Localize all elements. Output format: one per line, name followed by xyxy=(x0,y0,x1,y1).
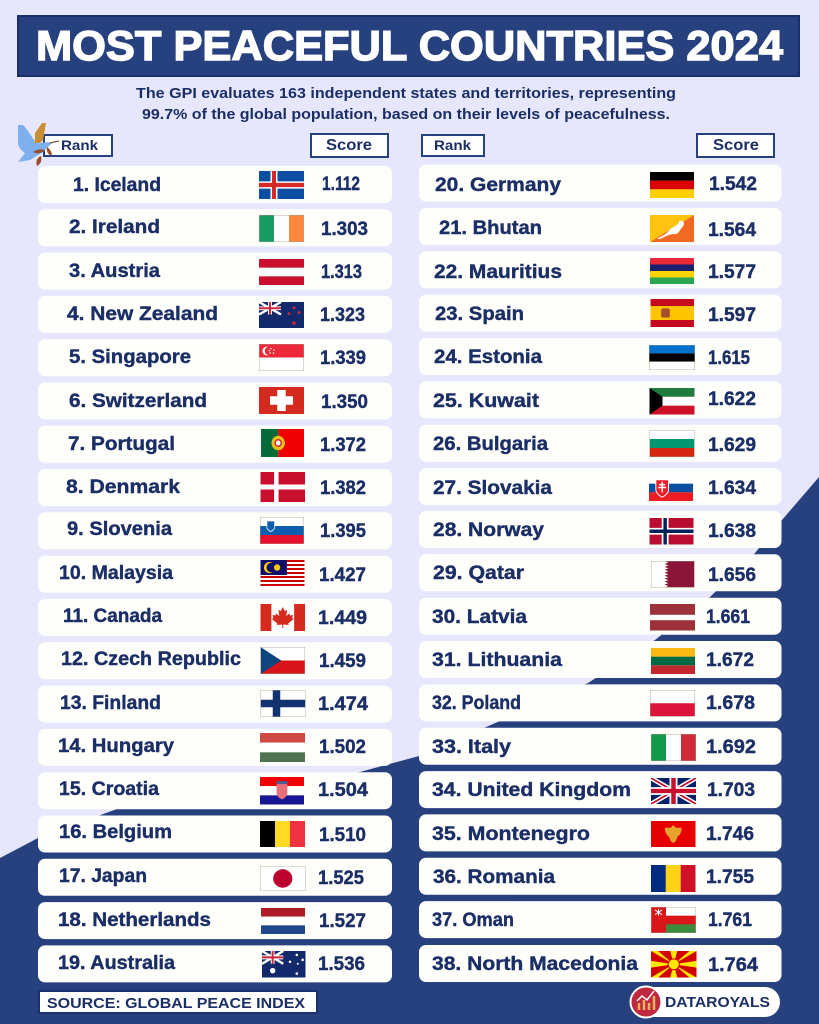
flag: Slovakia xyxy=(649,480,693,501)
row: Ireland xyxy=(38,209,392,246)
row: Mauritius xyxy=(419,251,782,288)
row: Slovenia: 1.395 xyxy=(320,520,366,542)
flag: Qatar xyxy=(651,561,694,588)
flag: Germany xyxy=(650,172,694,198)
row: Denmark: 1.382 xyxy=(320,477,366,499)
flag: Italy xyxy=(651,734,696,761)
row: Croatia: 15. Croatia xyxy=(59,778,159,800)
row: Latvia: 1.661 xyxy=(706,606,750,628)
flag: Estonia xyxy=(649,345,695,370)
row: Norway: 1.638 xyxy=(708,520,756,542)
row: Lithuania: 31. Lithuania xyxy=(432,649,562,671)
logo: Dataroyals: DATAROYALS xyxy=(665,995,770,1011)
flag: Denmark xyxy=(260,472,305,502)
row: Finland: 1.474 xyxy=(318,693,368,715)
row: Portugal xyxy=(38,426,392,463)
row: Belgium: 1.510 xyxy=(319,824,366,846)
row: Slovenia xyxy=(38,512,392,549)
row: Finland xyxy=(38,686,392,723)
flag: Spain xyxy=(650,299,694,327)
row: Iceland: 1. Iceland xyxy=(73,174,161,196)
row: Germany: 20. Germany xyxy=(435,174,561,196)
row: Bulgaria: 26. Bulgaria xyxy=(433,433,548,455)
row: Portugal: 7. Portugal xyxy=(68,433,175,455)
row: Slovakia: 27. Slovakia xyxy=(433,477,552,499)
row: Denmark: 8. Denmark xyxy=(66,476,180,498)
row: Romania xyxy=(419,858,782,895)
flag: Austria xyxy=(259,259,304,285)
row: Bhutan xyxy=(419,208,782,245)
row: Bhutan: 21. Bhutan xyxy=(439,217,542,239)
flag: Malaysia xyxy=(260,560,304,586)
flag: Netherlands xyxy=(261,908,305,934)
row: Austria: 1.313 xyxy=(321,261,362,283)
row: Switzerland: 6. Switzerland xyxy=(69,390,207,412)
row: United Kingdom: 1.703 xyxy=(707,779,755,801)
flag: Kuwait xyxy=(650,388,694,414)
row: Latvia: 30. Latvia xyxy=(432,606,527,628)
row: Japan xyxy=(38,859,392,896)
row: Australia: 1.536 xyxy=(318,953,365,975)
right rank header xyxy=(422,135,484,156)
row: Belgium: 16. Belgium xyxy=(59,821,172,843)
row: Romania: 36. Romania xyxy=(433,866,555,888)
row: New Zealand: 1.323 xyxy=(320,304,365,326)
row: North Macedonia: 1.764 xyxy=(708,954,758,976)
flag: Switzerland xyxy=(259,387,304,414)
flag: Romania xyxy=(651,865,696,892)
row: Lithuania xyxy=(419,641,782,678)
row: Montenegro: 35. Montenegro xyxy=(432,823,590,845)
row: Czech Republic xyxy=(38,642,392,679)
right rank header: Rank xyxy=(434,137,471,153)
row: Netherlands: 18. Netherlands xyxy=(58,909,211,931)
row: Malaysia: 10. Malaysia xyxy=(59,562,173,584)
row: Spain: 1.597 xyxy=(708,304,756,326)
row: North Macedonia xyxy=(419,945,782,982)
row: United Kingdom: 34. United Kingdom xyxy=(432,779,631,801)
row: Slovenia: 9. Slovenia xyxy=(67,518,172,540)
row: Czech Republic: 12. Czech Republic xyxy=(61,648,241,670)
row: Netherlands: 1.527 xyxy=(319,910,366,932)
row: Australia xyxy=(38,945,392,982)
row: New Zealand: 4. New Zealand xyxy=(67,303,218,325)
row: Norway xyxy=(419,511,782,548)
row: Kuwait xyxy=(419,381,782,418)
flag: Japan xyxy=(260,866,306,891)
row: Poland: 32. Poland xyxy=(432,692,521,714)
subtitle xyxy=(136,85,676,123)
row: Japan: 17. Japan xyxy=(59,865,147,887)
row: Oman: 37. Oman xyxy=(432,909,514,931)
left rank header xyxy=(44,135,112,156)
flag: Bulgaria xyxy=(650,430,694,457)
row: Estonia: 1.615 xyxy=(708,347,750,369)
row: Germany xyxy=(419,165,782,202)
flag: Latvia xyxy=(650,604,695,630)
row: Canada: 11. Canada xyxy=(63,605,162,627)
flag: New Zealand xyxy=(259,302,304,328)
row: United Kingdom xyxy=(419,771,782,808)
row: Mauritius: 1.577 xyxy=(708,261,756,283)
flag: Singapore xyxy=(259,344,304,371)
row: Lithuania: 1.672 xyxy=(706,649,754,671)
row: Italy xyxy=(419,728,782,765)
row: Malaysia: 1.427 xyxy=(319,564,366,586)
row: Singapore: 1.339 xyxy=(320,347,366,369)
row: Hungary: 14. Hungary xyxy=(58,735,174,757)
row: Finland: 13. Finland xyxy=(60,692,161,714)
row: Portugal: 1.372 xyxy=(320,434,366,456)
flag: Hungary xyxy=(260,733,305,762)
flag: Czech Republic xyxy=(260,647,305,674)
left score header: Score xyxy=(326,137,372,154)
flag: United Kingdom xyxy=(651,778,696,804)
row: Croatia: 1.504 xyxy=(318,779,368,801)
row: New Zealand xyxy=(38,296,392,333)
flag: North Macedonia xyxy=(651,951,696,978)
flag: Mauritius xyxy=(650,258,694,284)
row: Kuwait: 1.622 xyxy=(708,388,756,410)
flag: Canada xyxy=(260,604,305,631)
row: Kuwait: 25. Kuwait xyxy=(433,390,540,412)
row: Ireland: 1.303 xyxy=(321,218,368,240)
subtitle: 99.7% of the global population, based on their levels of peacefulness. xyxy=(142,106,670,123)
row: Estonia: 24. Estonia xyxy=(434,346,542,368)
flag: Lithuania xyxy=(651,648,695,674)
row: Netherlands xyxy=(38,902,392,939)
row: Bulgaria: 1.629 xyxy=(708,434,756,456)
row: Romania: 1.755 xyxy=(706,866,754,888)
flag: Finland xyxy=(260,690,306,717)
flag: Poland xyxy=(650,690,695,716)
row: Czech Republic: 1.459 xyxy=(319,650,366,672)
title: MOST PEACEFUL COUNTRIES 2024 xyxy=(36,22,784,69)
source note: SOURCE: GLOBAL PEACE INDEX xyxy=(47,995,305,1012)
row: Canada: 1.449 xyxy=(318,607,367,629)
row: Belgium xyxy=(38,816,392,852)
row: Australia: 19. Australia xyxy=(58,952,175,974)
row: Bhutan: 1.564 xyxy=(708,219,756,241)
row: Italy: 33. Italy xyxy=(432,736,511,758)
icon: dove xyxy=(18,123,59,166)
row: Slovakia: 1.634 xyxy=(708,477,756,499)
left rank header: Rank xyxy=(61,137,98,153)
row: Singapore: 5. Singapore xyxy=(69,346,191,368)
row: Oman xyxy=(419,901,782,938)
right score header xyxy=(697,134,774,157)
flag: Portugal xyxy=(261,429,304,457)
flag: Ireland xyxy=(259,215,304,242)
flag: Montenegro xyxy=(651,821,696,847)
flag: Australia xyxy=(262,951,306,978)
row: Switzerland: 1.350 xyxy=(321,391,368,413)
row: Ireland: 2. Ireland xyxy=(69,216,160,238)
row: Spain xyxy=(419,295,782,332)
flag: Belgium xyxy=(260,821,305,847)
row: Italy: 1.692 xyxy=(706,736,756,758)
row: Slovakia xyxy=(419,468,782,505)
row: Japan: 1.525 xyxy=(318,867,364,889)
flag: Oman xyxy=(651,907,696,933)
source note xyxy=(39,991,317,1013)
row: Hungary: 1.502 xyxy=(319,736,366,758)
flag: Iceland xyxy=(259,171,304,199)
logo: Dataroyals xyxy=(630,986,780,1018)
row: North Macedonia: 38. North Macedonia xyxy=(432,953,638,975)
row: Mauritius: 22. Mauritius xyxy=(434,261,562,283)
row: Montenegro: 1.746 xyxy=(706,823,754,845)
row: Iceland: 1.112 xyxy=(322,173,360,195)
row: Denmark xyxy=(38,469,392,506)
row: Poland xyxy=(419,684,782,721)
flag: Slovenia xyxy=(260,517,304,544)
row: Canada xyxy=(38,599,392,636)
row: Hungary xyxy=(38,729,392,766)
row: Qatar: 1.656 xyxy=(708,564,756,586)
row: Austria: 3. Austria xyxy=(69,260,160,282)
row: Norway: 28. Norway xyxy=(433,519,544,541)
row: Singapore xyxy=(38,339,392,376)
row: Croatia xyxy=(38,772,392,809)
flag: Norway xyxy=(650,518,694,544)
row: Malaysia xyxy=(38,556,392,593)
row: Bulgaria xyxy=(419,425,782,462)
row: Estonia xyxy=(419,338,782,375)
row: Spain: 23. Spain xyxy=(435,303,524,325)
row: Montenegro xyxy=(419,814,782,851)
row: Poland: 1.678 xyxy=(706,692,755,714)
flag: Croatia xyxy=(260,777,304,804)
row: Qatar xyxy=(419,554,782,591)
flag: Bhutan xyxy=(650,215,694,242)
row: Switzerland xyxy=(38,382,392,420)
row: Austria xyxy=(38,253,392,290)
left score header xyxy=(311,134,388,157)
row: Iceland xyxy=(38,166,392,203)
row: Qatar: 29. Qatar xyxy=(433,562,524,584)
row: Oman: 1.761 xyxy=(708,909,752,931)
right score header: Score xyxy=(713,137,759,154)
row: Germany: 1.542 xyxy=(709,173,757,195)
subtitle: The GPI evaluates 163 independent states and territories, representing xyxy=(136,85,676,102)
row: Latvia xyxy=(419,598,782,635)
